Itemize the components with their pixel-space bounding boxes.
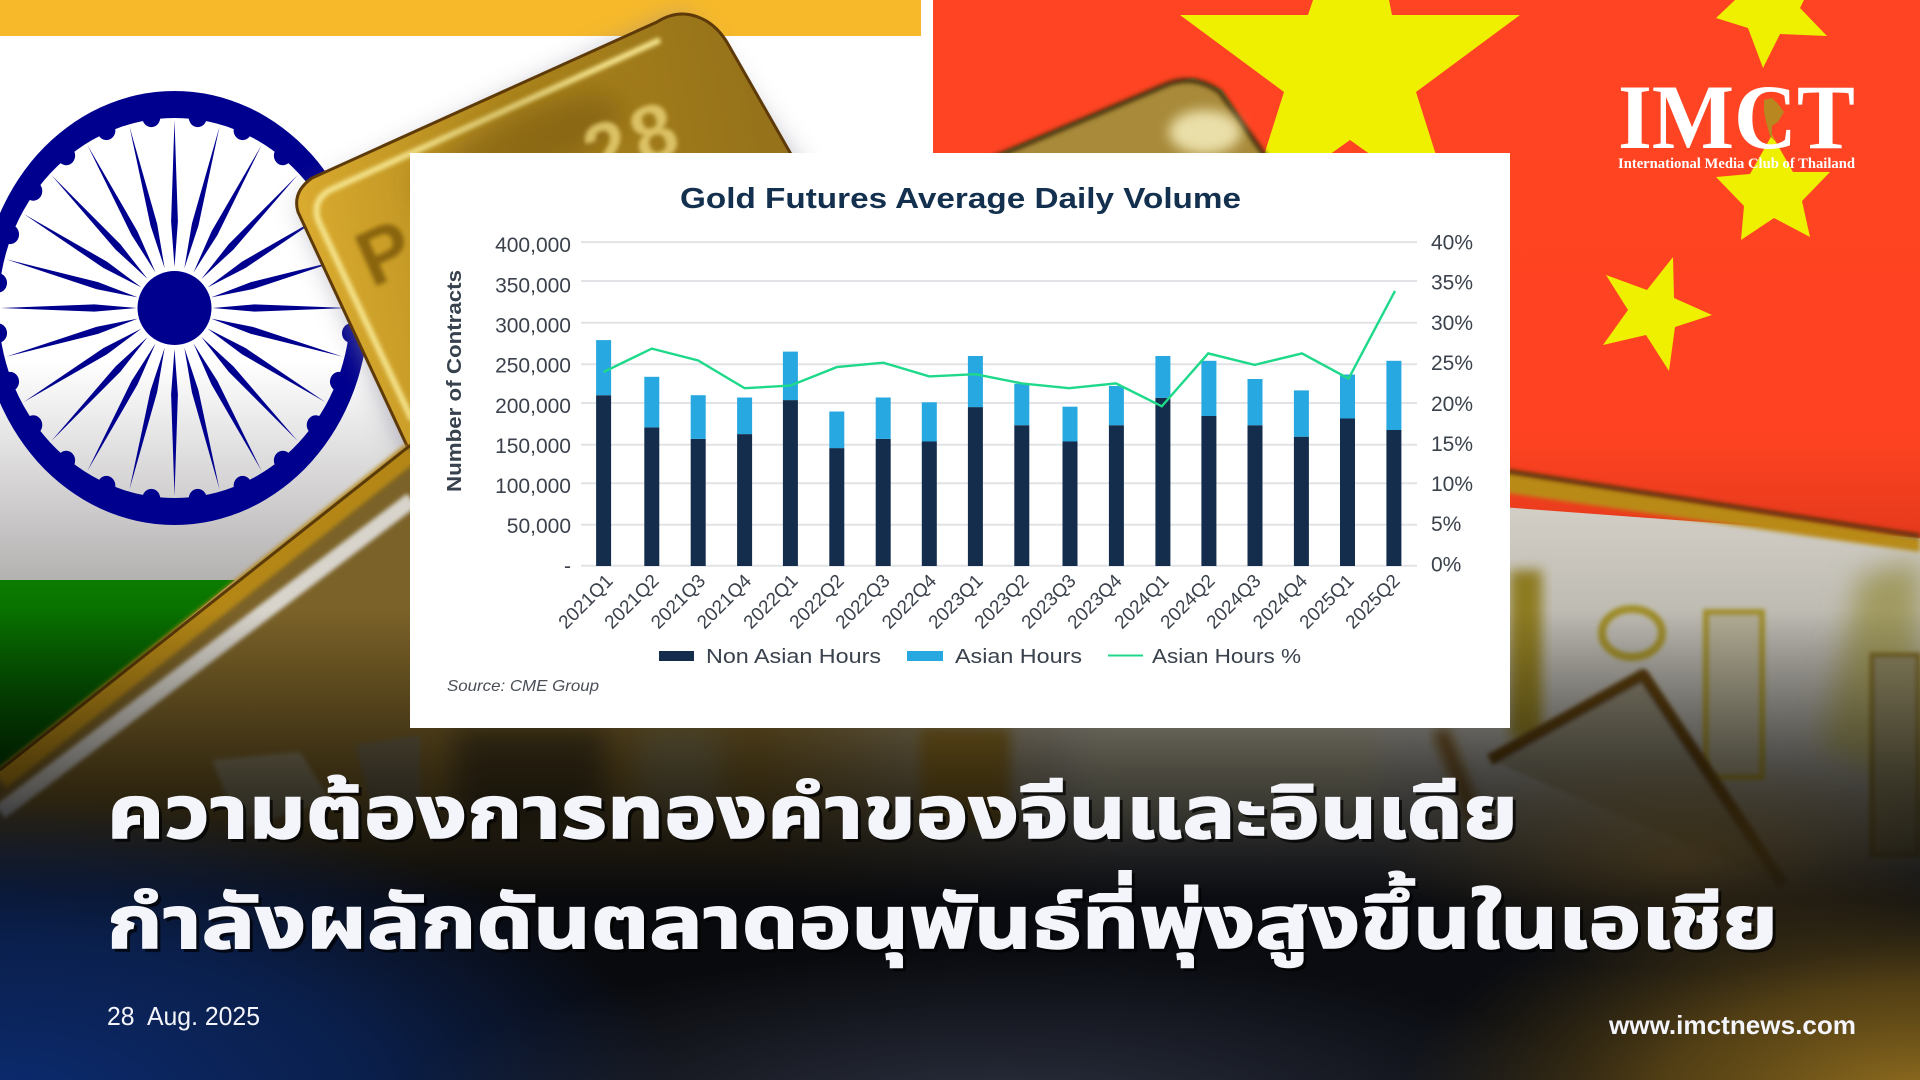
- left axis labels: 150,000: [495, 435, 571, 458]
- headline shadow: กำลังผลักดันตลาดอนุพันธ์ที่พุ่งสูงขึ้นในเอเชีย: [110, 874, 1781, 971]
- x axis labels: 2025Q2: [1342, 571, 1405, 633]
- headline shadow: [110, 774, 1781, 971]
- left axis labels: 200,000: [495, 395, 571, 418]
- date: 28 Aug. 2025: [107, 1001, 260, 1031]
- right axis labels: 20%: [1431, 393, 1473, 416]
- stacked bars: asian hours: [596, 340, 1401, 448]
- left axis labels: 250,000: [495, 354, 571, 378]
- left axis labels: 350,000: [495, 274, 571, 298]
- legend: Asian Hours %: [1152, 646, 1301, 668]
- x axis labels: 2023Q2: [971, 571, 1034, 633]
- logo: IMCT: International Media Club of Thailand: [1618, 156, 1856, 172]
- x axis labels: 2022Q3: [832, 571, 895, 633]
- x axis labels: [555, 570, 1405, 633]
- website: www.imctnews.com: [1608, 1010, 1856, 1040]
- panel: chart card: [410, 153, 1510, 728]
- bottom dark fade: [0, 610, 1920, 1080]
- icon: thailand map: [1764, 98, 1784, 142]
- left axis labels: [495, 234, 571, 578]
- right axis labels: 30%: [1431, 312, 1473, 335]
- right axis labels: 15%: [1431, 433, 1473, 456]
- left axis labels: 50,000: [507, 515, 571, 538]
- x axis labels: 2023Q1: [925, 571, 988, 633]
- stacked bars: non asian hours: [596, 395, 1401, 566]
- x axis labels: 2021Q4: [693, 570, 756, 633]
- top gold bar: P: [343, 202, 426, 304]
- x axis labels: 2024Q4: [1249, 570, 1312, 633]
- x axis labels: 2021Q3: [647, 571, 710, 633]
- grid lines: [581, 242, 1417, 566]
- bottom colour glows: [0, 750, 1920, 1080]
- central gold bar top right: [940, 78, 1270, 300]
- china flag: [933, 0, 1920, 545]
- top gold bar: 28: [572, 82, 695, 198]
- x axis labels: 2024Q3: [1203, 571, 1266, 633]
- right axis labels: 0%: [1431, 554, 1461, 576]
- right axis labels: 10%: [1431, 473, 1473, 496]
- silver gold bar lower right: [760, 470, 1920, 1080]
- source note: Source: CME Group: [447, 678, 599, 695]
- right axis labels: 5%: [1431, 513, 1461, 536]
- x axis labels: 2025Q1: [1296, 571, 1359, 633]
- legend: [659, 646, 1301, 668]
- left axis labels: -: [564, 555, 571, 578]
- x axis labels: 2024Q1: [1111, 571, 1174, 633]
- left axis labels: 100,000: [495, 475, 571, 498]
- left axis labels: 400,000: [495, 234, 571, 257]
- right axis labels: 40%: [1431, 232, 1473, 254]
- x axis labels: 2023Q4: [1064, 570, 1127, 633]
- x axis labels: 2021Q1: [555, 571, 618, 633]
- x axis labels: 2022Q2: [786, 571, 849, 633]
- x axis labels: 2022Q1: [740, 571, 803, 633]
- line: asian hours percent: [604, 291, 1395, 406]
- headline shadow: ความต้องการทองคำของจีนและอินเดีย: [110, 774, 1521, 857]
- soft shadow around top gold bar: [300, 15, 800, 460]
- headline: ความต้องการทองคำของจีนและอินเดีย: [107, 771, 1518, 854]
- x axis labels: 2023Q3: [1018, 571, 1081, 633]
- top gold bar: [297, 14, 800, 470]
- x axis labels: 2024Q2: [1157, 571, 1220, 633]
- x axis labels: 2021Q2: [601, 571, 664, 633]
- india flag: [0, 0, 935, 800]
- headline: [107, 771, 1781, 971]
- logo: IMCT: IMCT: [1618, 66, 1855, 168]
- left axis labels: 300,000: [495, 314, 571, 338]
- chart title: Gold Futures Average Daily Volume: [680, 183, 1241, 215]
- legend: Asian Hours: [955, 646, 1082, 668]
- left axis title: Number of Contracts: [444, 270, 466, 492]
- headline: กำลังผลักดันตลาดอนุพันธ์ที่พุ่งสูงขึ้นในเอเชีย: [107, 871, 1778, 968]
- right axis labels: 25%: [1431, 352, 1473, 375]
- legend: Non Asian Hours: [706, 646, 881, 668]
- lower gold bar left: [0, 444, 1480, 1080]
- ashoka chakra: [0, 91, 368, 525]
- right axis labels: 35%: [1431, 272, 1473, 294]
- x axis labels: 2022Q4: [878, 570, 941, 633]
- right axis labels: [1431, 232, 1473, 576]
